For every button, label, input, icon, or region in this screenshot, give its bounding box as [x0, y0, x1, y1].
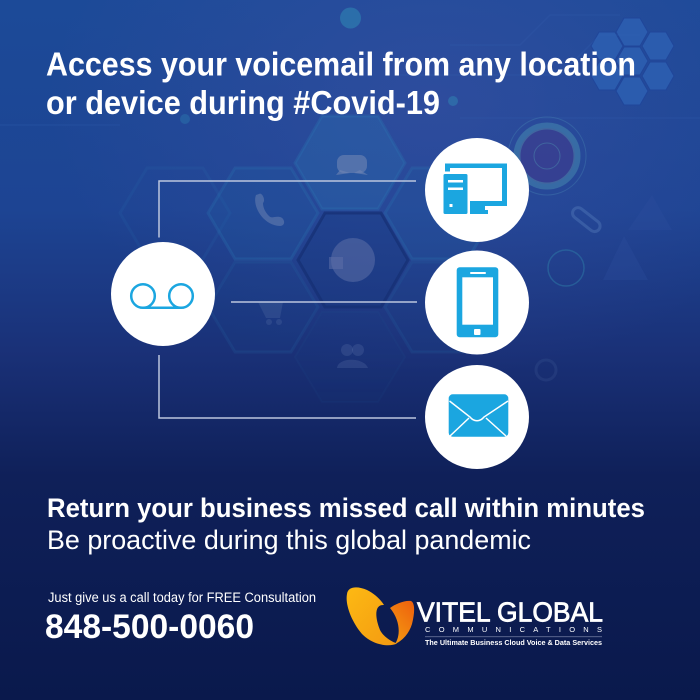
- icon: envelope: [449, 394, 508, 437]
- logo mark: [347, 587, 414, 645]
- faint icon: people: [337, 344, 368, 368]
- faint icon: globe: [329, 238, 375, 282]
- logo tagline: The Ultimate Business Cloud Voice & Data Services: [425, 640, 602, 647]
- logo wordmark: VITEL GLOBAL: [417, 596, 603, 628]
- decorative triangles: [603, 195, 672, 280]
- desktop computer node: [425, 138, 529, 242]
- phone number: 848-500-0060: [45, 608, 254, 646]
- decorative ring: [548, 250, 584, 286]
- smartphone node: [425, 250, 529, 354]
- faint icon: chat: [336, 155, 368, 175]
- decorative dots: [180, 8, 458, 124]
- faint icon: phone: [255, 194, 284, 226]
- icon: desktop computer: [444, 164, 507, 214]
- faint icon: camera: [536, 360, 556, 380]
- background hexagon network: [206, 114, 480, 354]
- decorative target ring: [508, 117, 586, 195]
- icon: smartphone: [457, 267, 498, 337]
- title: Access your voicemail from any location: [46, 46, 636, 82]
- icon: voicemail: [131, 284, 193, 308]
- decorative chain link: [570, 205, 602, 234]
- logo: [347, 587, 603, 647]
- decorative circuit lines: [0, 15, 700, 125]
- faint icon: cart: [258, 302, 283, 325]
- honeycomb cluster: [591, 18, 674, 105]
- voicemail node: [111, 242, 215, 346]
- connector lines: [159, 181, 417, 418]
- subheading: Return your business missed call within minutes: [47, 493, 645, 523]
- title: [46, 46, 636, 121]
- supporting line: Be proactive during this global pandemic: [47, 525, 531, 555]
- email node: [425, 365, 529, 469]
- logo subtitle: COMMUNICATIONS: [425, 625, 602, 634]
- call to action: Just give us a call today for FREE Consultation: [48, 590, 316, 605]
- title: or device during #Covid-19: [46, 84, 440, 121]
